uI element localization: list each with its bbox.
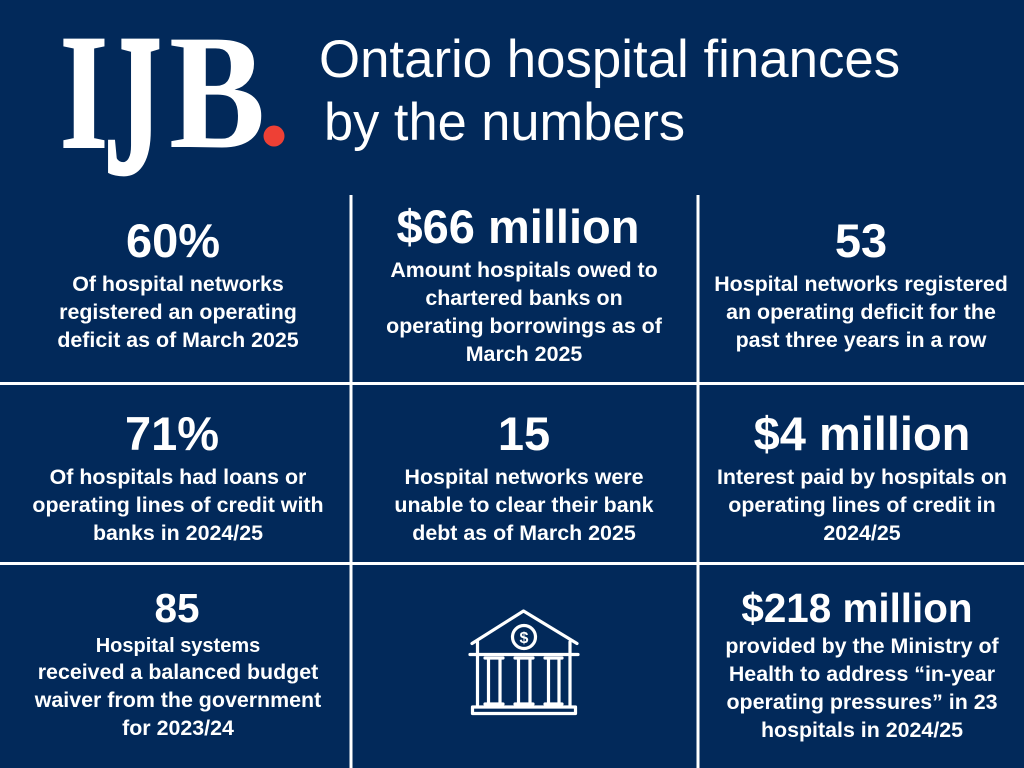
icon: bank building xyxy=(470,611,578,714)
panel: $66 million: $66 million xyxy=(397,200,639,253)
panel: $218 million xyxy=(725,585,1000,742)
panel: 53 xyxy=(714,214,1008,352)
panel: 53: Hospital networks registered xyxy=(714,272,1008,296)
panel: 71%: banks in 2024/25 xyxy=(93,521,263,545)
panel: 85: 85 xyxy=(154,585,200,631)
panel: 85 xyxy=(34,585,321,740)
panel: $66 million: Amount hospitals owed to xyxy=(390,258,658,282)
logo: IJB xyxy=(60,0,284,217)
panel: 85: received a balanced budget xyxy=(38,660,318,684)
panel: $66 million: chartered banks on xyxy=(425,286,623,310)
panel: 15: unable to clear their bank xyxy=(394,493,654,517)
icon: bank building: $ xyxy=(520,630,529,647)
panel: 60% xyxy=(57,214,299,352)
title xyxy=(319,30,900,152)
panel: 71%: 71% xyxy=(125,407,219,460)
panel: $66 million xyxy=(386,200,663,366)
logo red dot xyxy=(264,126,284,146)
logo: IJB: J xyxy=(104,0,161,217)
panel: 60%: deficit as of March 2025 xyxy=(57,328,299,352)
title: Ontario hospital finances xyxy=(319,30,900,89)
panel: $4 million: operating lines of credit in xyxy=(728,493,996,517)
panel: 85: waiver from the government xyxy=(34,688,321,712)
panel: 15 xyxy=(394,407,654,545)
panel: 15: debt as of March 2025 xyxy=(412,521,636,545)
logo: IJB: I xyxy=(60,2,108,183)
panel: 53: past three years in a row xyxy=(736,328,987,352)
panel: $218 million: provided by the Ministry of xyxy=(725,634,1000,658)
panel: $218 million: $218 million xyxy=(741,585,973,631)
panel: $4 million: 2024/25 xyxy=(823,521,901,545)
panel: 71%: Of hospitals had loans or xyxy=(50,465,306,489)
panel: $66 million: March 2025 xyxy=(466,342,582,366)
panel: $218 million: operating pressures” in 23 xyxy=(726,690,998,714)
panel: 60%: Of hospital networks xyxy=(72,272,284,296)
panel: $4 million: $4 million xyxy=(754,407,970,460)
panel: 85: for 2023/24 xyxy=(122,716,234,740)
panel: $218 million: hospitals in 2024/25 xyxy=(761,718,963,742)
panel: 71% xyxy=(32,407,324,545)
panel: 60%: 60% xyxy=(126,214,220,267)
panel: 15: Hospital networks were xyxy=(405,465,644,489)
title: by the numbers xyxy=(324,94,685,152)
panel: 60%: registered an operating xyxy=(59,300,297,324)
panel: 53: an operating deficit for the xyxy=(726,300,996,324)
panel: 85: Hospital systems xyxy=(96,635,260,657)
panel: $4 million xyxy=(717,407,1007,545)
logo: IJB: B xyxy=(169,2,265,183)
panel: $218 million: Health to address “in-year xyxy=(729,662,995,686)
panel: $66 million: operating borrowings as of xyxy=(386,314,663,338)
panel: $4 million: Interest paid by hospitals on xyxy=(717,465,1007,489)
panel: 15: 15 xyxy=(498,407,550,460)
panel: 71%: operating lines of credit with xyxy=(32,493,324,517)
panel: 53: 53 xyxy=(835,214,887,267)
